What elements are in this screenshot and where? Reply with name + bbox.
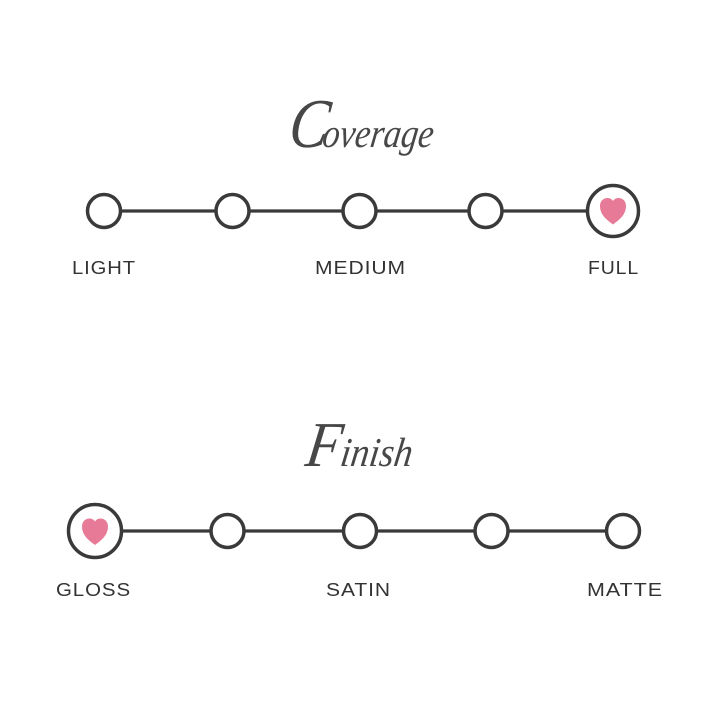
label: full: FULL — [588, 258, 639, 278]
marker: finish step 3 — [344, 514, 376, 548]
heading: Coverage: Coverage — [285, 86, 441, 163]
label: gloss: GLOSS — [56, 580, 131, 600]
marker: coverage step 3 — [343, 194, 376, 228]
marker: coverage step 1 — [88, 194, 120, 228]
selected marker: gloss finish — [68, 504, 122, 558]
label: light: LIGHT — [72, 258, 136, 278]
marker: finish step 5 — [606, 514, 640, 548]
panel: finish scale — [56, 410, 663, 600]
label: satin: SATIN — [326, 580, 391, 600]
heading: Finish: Finish — [301, 410, 419, 481]
scale line: finish — [95, 529, 623, 533]
panel: coverage scale — [72, 86, 639, 278]
marker: finish step 2 — [211, 514, 244, 548]
icon: heart — [600, 198, 626, 224]
marker: coverage step 4 — [469, 194, 502, 228]
selected marker: full coverage — [588, 186, 638, 236]
label: matte: MATTE — [587, 580, 663, 600]
icon: heart — [82, 518, 108, 545]
scale line: coverage — [104, 209, 613, 213]
marker: finish step 4 — [475, 514, 508, 548]
marker: coverage step 2 — [216, 194, 249, 228]
label: medium: MEDIUM — [315, 258, 406, 278]
